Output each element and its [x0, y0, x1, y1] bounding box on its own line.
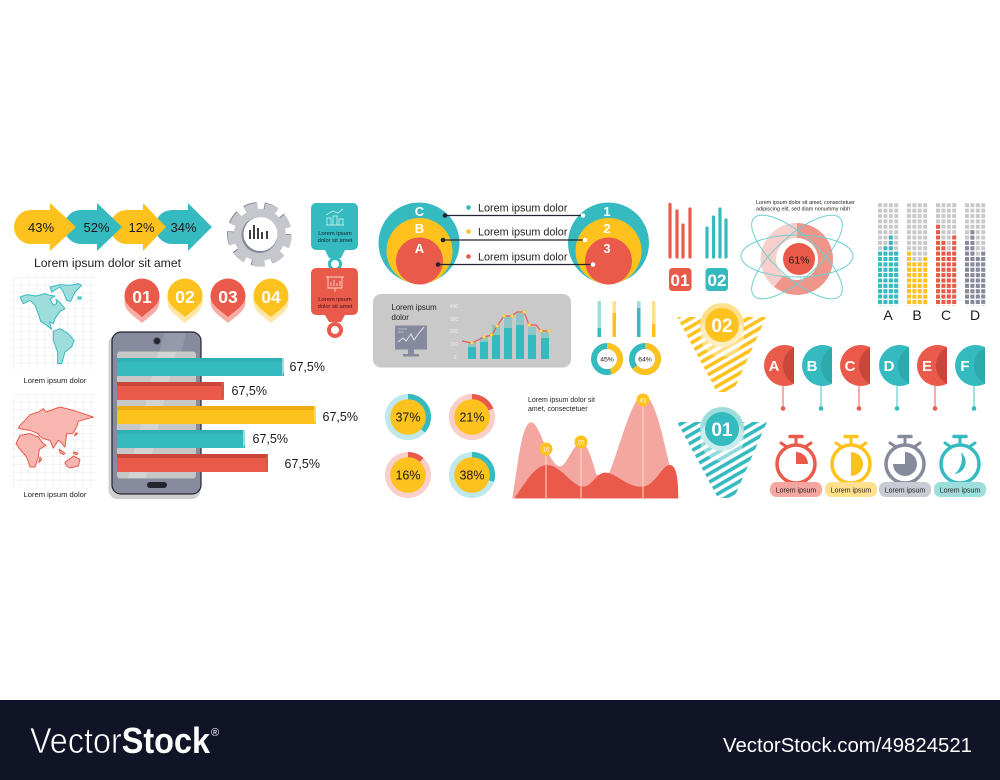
- legend: Lorem ipsum dolor: [478, 226, 568, 238]
- stopwatch slate: [879, 436, 931, 497]
- nested circles diagram ABC: C: [415, 204, 425, 219]
- marker C: C: [845, 358, 856, 375]
- atom pie 61%: 61%: [788, 254, 810, 266]
- pixel bar chart A: [880, 203, 896, 306]
- nested circles diagram 123: 1: [603, 204, 611, 219]
- panel: gray bar and line chart: Lorem ipsum: [392, 303, 437, 312]
- vertical bars 01: [669, 204, 692, 291]
- phone with horizontal bars: 67,5%: [322, 410, 358, 424]
- striped funnel 02: 02: [711, 316, 733, 337]
- map caption: Eurasia: Lorem ipsum dolor: [24, 490, 87, 499]
- area chart text: Lorem ipsum dolor sit: [528, 397, 595, 404]
- bar 1: [117, 358, 284, 376]
- nested circles diagram ABC: A: [415, 241, 425, 256]
- arrow percentage row: 12%: [128, 220, 155, 235]
- donut 64%: [632, 346, 658, 372]
- bar 3: [117, 406, 316, 424]
- footer image id: VectorStock.com/49824521: [723, 735, 972, 757]
- area chart text: [528, 397, 595, 413]
- marker E: [917, 345, 947, 411]
- callout: red presentation tag: [311, 268, 358, 336]
- chart axis labels: 200: [450, 329, 458, 335]
- legend: [466, 202, 568, 264]
- stopwatch teal: [934, 436, 986, 497]
- marker F: F: [960, 358, 970, 375]
- callout: red presentation tag: Lorem ipsum: [318, 297, 352, 303]
- pixel bar chart B: [909, 203, 925, 306]
- ring gauge 37%: 37%: [395, 410, 421, 424]
- ring gauge 16%: [388, 455, 428, 495]
- ring gauge 21%: 21%: [459, 410, 485, 424]
- icon: gear with bars: [230, 206, 288, 263]
- chart bars: [468, 313, 549, 359]
- ring gauge 21%: [452, 397, 492, 437]
- chart axis labels: 300: [450, 317, 458, 323]
- pixel bar chart D: [967, 203, 983, 306]
- nested circles diagram 123: 2: [603, 221, 611, 236]
- legend: Lorem ipsum dolor: [478, 252, 568, 264]
- chart line: [462, 311, 550, 344]
- icon: phone: [108, 332, 201, 499]
- donut 64%: 64%: [638, 356, 652, 364]
- ring gauge 38%: [452, 455, 492, 495]
- callout: red presentation tag: dolor sit amet: [318, 304, 353, 310]
- chart axis labels: 0: [454, 355, 457, 361]
- footer band: [0, 700, 1000, 780]
- striped funnel 02: [677, 303, 766, 392]
- pixel chart labels: D: [970, 307, 980, 323]
- arrow percentage row: [14, 203, 212, 251]
- phone with horizontal bars: 67,5%: [232, 384, 267, 398]
- stopwatch red: [770, 436, 822, 497]
- marker F: [955, 345, 985, 411]
- stopwatch teal: Lorem ipsum: [940, 488, 980, 494]
- map: Americas: [13, 277, 96, 370]
- legend: Lorem ipsum dolor: [478, 202, 568, 214]
- small vertical progress bars: [598, 301, 656, 337]
- chart axis labels: 400: [450, 304, 458, 310]
- striped funnel 01: [677, 407, 767, 498]
- stopwatch yellow: Lorem ipsum: [831, 488, 871, 494]
- marker B: B: [807, 358, 818, 375]
- bar 4: [117, 430, 245, 448]
- arrow percentage row: 43%: [28, 220, 54, 235]
- stopwatch slate: Lorem ipsum: [885, 488, 925, 494]
- callout: teal chart tag: Lorem ipsum: [318, 231, 352, 237]
- bar 2: [117, 382, 224, 400]
- numbered map pins: 02: [175, 287, 195, 307]
- pixel chart labels: C: [941, 307, 951, 323]
- map caption: Americas: Lorem ipsum dolor: [24, 376, 87, 385]
- stopwatch yellow: [825, 436, 877, 497]
- pixel chart labels: [883, 307, 980, 323]
- marker A: A: [769, 358, 780, 375]
- marker D: D: [884, 358, 895, 375]
- ring gauge 16%: 16%: [395, 468, 421, 482]
- striped funnel 01: 01: [711, 420, 733, 441]
- atom text: Lorem ipsum dolor sit amet, consectetuer: [756, 200, 855, 206]
- chart axis labels: [450, 304, 458, 361]
- chart axis labels: 100: [450, 342, 458, 348]
- arrow percentage row: 34%: [170, 220, 197, 235]
- numbered map pins: 01: [132, 287, 152, 307]
- numbered map pins: 04: [261, 287, 281, 307]
- arrow row caption: Lorem ipsum dolor sit amet: [34, 256, 182, 270]
- panel: gray bar and line chart: dolor: [392, 313, 409, 322]
- icon: monitor: [395, 326, 427, 356]
- pixel bar chart C: [938, 203, 954, 306]
- phone with horizontal bars: 67,5%: [284, 457, 320, 471]
- vertical bars 01: 01: [671, 271, 689, 290]
- callout: teal chart tag: dolor sit amet: [318, 238, 353, 244]
- pixel chart labels: B: [912, 307, 922, 323]
- area chart text: amet, consectetuer: [528, 406, 588, 413]
- nested circles diagram 123: 3: [603, 241, 611, 256]
- atom pie 61%: [740, 203, 854, 311]
- area chart: 16: [543, 448, 550, 454]
- panel: gray bar and line chart: [373, 294, 571, 368]
- phone with horizontal bars: 67,5%: [290, 360, 325, 374]
- atom text: adipiscing elit, sed diam nonummy nibh: [756, 206, 850, 212]
- marker D: [879, 345, 909, 411]
- phone with horizontal bars: [108, 332, 358, 499]
- nested circles diagram ABC: [378, 202, 460, 284]
- lettered half-circle markers: [764, 345, 985, 411]
- connector lines: [436, 213, 595, 267]
- nested circles diagram ABC: B: [415, 221, 424, 236]
- phone with horizontal bars: 67,5%: [252, 432, 288, 446]
- marker B: [802, 345, 832, 411]
- atom text: [756, 200, 855, 212]
- arrow percentage row: 52%: [83, 220, 110, 235]
- donut 45%: 45%: [600, 356, 614, 364]
- marker E: E: [922, 358, 932, 375]
- area chart: 43: [640, 398, 647, 404]
- marker A: [764, 345, 794, 411]
- callout: teal chart tag: [311, 203, 358, 270]
- numbered map pins: [124, 278, 288, 323]
- bar 5: [117, 454, 268, 472]
- nested circles diagram 123: [568, 202, 649, 284]
- footer logo: VectorStock: [30, 720, 211, 761]
- donut 45%: [594, 346, 620, 372]
- area chart: 20: [578, 440, 585, 446]
- stopwatch red: Lorem ipsum: [776, 488, 816, 494]
- vertical bars 02: 02: [708, 271, 726, 290]
- ring gauge 38%: 38%: [459, 468, 485, 482]
- numbered map pins: 03: [218, 287, 238, 307]
- area chart: [512, 394, 678, 498]
- map: Eurasia and Africa: [13, 394, 96, 487]
- vertical bars 02: [706, 209, 728, 291]
- footer registered mark: ®: [211, 727, 219, 739]
- pixel chart labels: A: [883, 307, 893, 323]
- marker C: [840, 345, 870, 411]
- ring gauge 37%: [388, 397, 428, 437]
